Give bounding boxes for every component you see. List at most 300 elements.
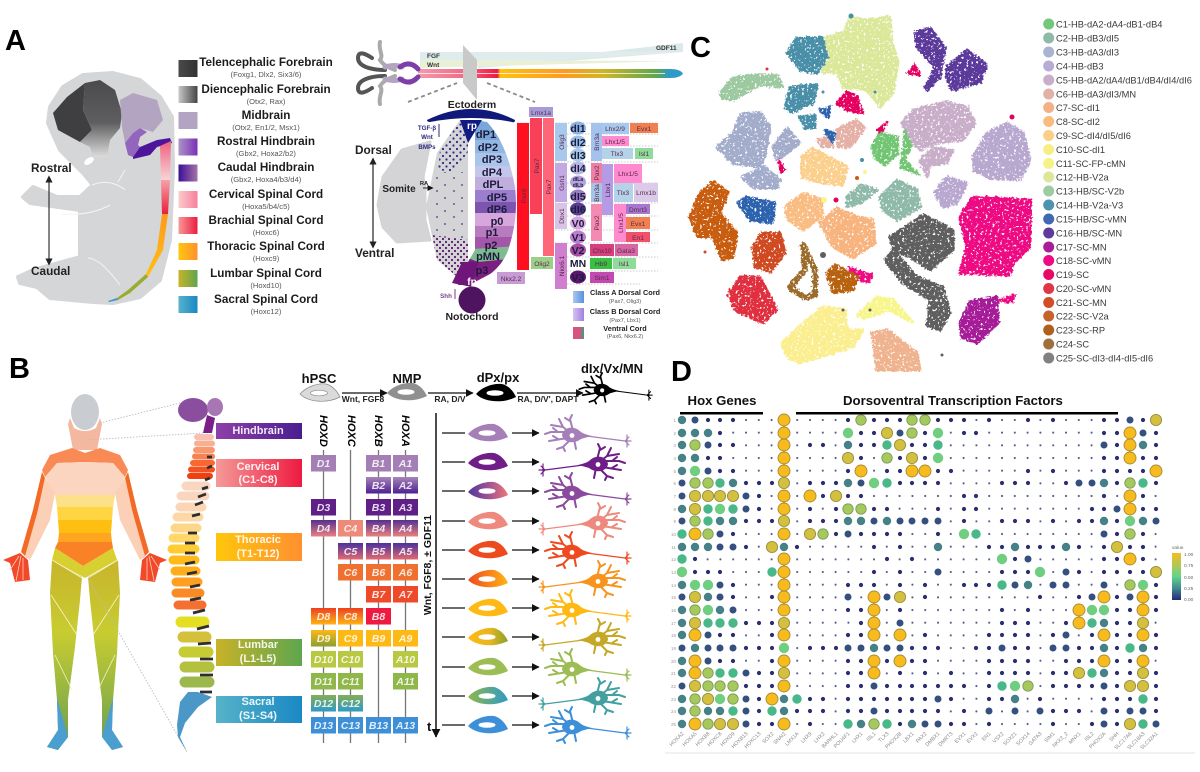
class A: (Pax7, Olig3) <box>609 299 641 305</box>
column Pax6 <box>517 123 529 270</box>
panel D: gene labels: SOX2 <box>761 731 775 745</box>
panel D: gene labels: SOX14 <box>1015 731 1031 747</box>
cluster C20 <box>728 277 777 323</box>
right arm <box>115 472 167 582</box>
tube right half bands <box>458 121 516 285</box>
panel D: gene labels: SLC17A6 <box>1113 731 1133 751</box>
box Olig2: Olig2 <box>534 261 550 268</box>
morphogen labels: Wnt <box>421 134 433 141</box>
HOX column headings: HOXC <box>345 415 357 448</box>
panel C: tSNE clusters <box>690 17 1030 370</box>
row 5 <box>468 532 631 568</box>
cluster C25 <box>885 215 953 330</box>
legend cervical: (Hoxa5/b4/c5) <box>242 202 290 211</box>
heading Hox Genes: Hox Genes <box>688 393 756 408</box>
panel D: row labels: 14 <box>671 583 676 588</box>
row 7 <box>468 590 631 626</box>
roof plate <box>460 120 482 143</box>
HOX boxes: D11 <box>314 676 333 688</box>
cluster C1 <box>872 133 898 165</box>
scattered mixed cells <box>900 130 920 175</box>
panel B: spine <box>172 398 223 752</box>
morphogen labels: BMPs <box>418 144 436 151</box>
panel D: row labels: 21 <box>671 671 676 676</box>
marker boxes: En1 <box>632 235 644 242</box>
HOX boxes: C6 <box>344 567 357 579</box>
progenitor domain labels: dP6 <box>487 204 507 216</box>
HOX boxes: B8 <box>372 611 385 623</box>
morphogen labels <box>418 124 455 300</box>
HOX boxes: C13 <box>341 720 360 732</box>
HOX column headings <box>317 415 411 448</box>
cluster C10 <box>782 307 863 363</box>
class B: (Pax7, Lbx1) <box>609 318 641 324</box>
HOX boxes: C12 <box>341 698 360 710</box>
neuron class ellipses: dI3 <box>570 150 586 162</box>
ectoderm arc <box>427 109 515 122</box>
label Wnt: Wnt <box>427 62 440 69</box>
legend telencephalic <box>178 56 333 79</box>
vertebral discs <box>185 457 213 692</box>
HOX boxes: C9 <box>344 633 357 645</box>
brain top view <box>358 42 418 104</box>
panel D: value colour scale: 0.25 <box>1184 586 1194 592</box>
panel A: neural tube axis schematic <box>358 42 683 104</box>
panel D: gene labels <box>669 731 1159 751</box>
cluster C8 <box>785 193 822 230</box>
panel D: gene labels: HOXC8 <box>707 731 723 748</box>
neuron class ellipses: dI5 <box>570 191 586 203</box>
thoracic cord <box>146 214 168 277</box>
column Olig3 <box>555 123 567 161</box>
panel D: row labels: 8 <box>673 507 676 512</box>
cervical bar: (C1-C8) <box>238 474 278 486</box>
C2: C2-HB-dB3/dI5 <box>1056 34 1119 44</box>
HOX boxes: D4 <box>317 523 330 535</box>
progenitor domain labels: p1 <box>486 227 498 239</box>
sacrum <box>177 692 212 752</box>
vertebra bodies <box>172 437 212 682</box>
panel D: row labels: 10 <box>671 532 676 537</box>
panel D: row labels: 4 <box>673 456 676 461</box>
brachial cord <box>161 180 170 214</box>
C18: C18-SC-vMN <box>1056 256 1111 266</box>
label FGF: FGF <box>427 53 440 60</box>
C7: C7-SC-dI1 <box>1056 103 1100 113</box>
midbrain <box>120 93 163 143</box>
legend thoracic <box>178 240 325 263</box>
neuron class ellipses: dI4 <box>570 163 586 175</box>
marker boxes: Tlx3 <box>617 190 630 197</box>
column Nkx6.1: Nkx6.1 <box>559 255 566 276</box>
C6: C6-HB-dA3/dI3/MN <box>1056 90 1136 100</box>
legend sacral <box>178 293 318 316</box>
progenitor domain labels: dP3 <box>482 154 502 166</box>
column Pax7 <box>530 118 542 214</box>
HOX boxes: A10 <box>395 654 415 666</box>
HOX column headings: HOXB <box>372 415 384 447</box>
cluster C23 <box>827 265 858 293</box>
column Pax7 second <box>543 118 554 256</box>
panel B: region bars <box>216 423 302 723</box>
cervical cord <box>160 141 171 180</box>
hips <box>52 548 117 578</box>
neuron class ellipses: MN <box>570 258 586 270</box>
notochord <box>458 286 486 314</box>
cervical bar: Cervical <box>237 461 279 473</box>
C22: C22-SC-V2a <box>1056 312 1110 322</box>
ventral progenitor dots <box>432 235 468 285</box>
HOX boxes: C5 <box>344 546 357 558</box>
cluster C22 <box>690 182 737 260</box>
hPSC stage: hPSC <box>302 371 337 386</box>
panel D: gene labels: NKX2_2 <box>1052 731 1069 749</box>
panel D: row labels: 3 <box>673 443 676 448</box>
cluster C4 <box>935 123 1030 207</box>
progenitor domain labels: dP1 <box>476 129 496 141</box>
HOX boxes: D3 <box>317 502 330 514</box>
legend diencephalic: (Otx2, Rax) <box>247 97 286 106</box>
C20: C20-SC-vMN <box>1056 284 1111 294</box>
panel A: regional legend <box>178 56 333 316</box>
panel D: row labels: 19 <box>671 646 676 651</box>
HOX boxes: D12 <box>314 698 333 710</box>
NMP stage <box>387 371 427 400</box>
column Nkx6.1 <box>555 243 567 289</box>
marker boxes: Lmx1b <box>636 190 656 197</box>
class A <box>573 288 660 305</box>
HOX boxes: C8 <box>344 611 357 623</box>
panel D: row labels: 20 <box>671 659 676 664</box>
panel B: human dermatome body <box>3 394 203 752</box>
panel D: value colour scale <box>1172 545 1194 603</box>
panel D: row labels: 22 <box>671 684 676 689</box>
label caudal: Caudal <box>31 264 70 278</box>
column Pax6: Pax6 <box>521 188 528 204</box>
panel D: gene labels: LBX1 <box>902 731 915 744</box>
left leg <box>47 560 82 750</box>
column Olig3: Olig3 <box>559 134 566 150</box>
HOX lines <box>324 450 406 743</box>
panel A: embryo illustration <box>18 73 173 303</box>
marker boxes: Evx1 <box>637 126 652 133</box>
head <box>71 394 99 430</box>
cluster C6 <box>818 120 865 147</box>
HOX boxes: D1 <box>317 458 330 470</box>
panel D: gene labels: HOXB13 <box>731 731 749 750</box>
progenitor domain labels: dP5 <box>487 192 507 204</box>
column Dbx1 <box>555 203 567 229</box>
legend brachial <box>178 214 323 237</box>
torso bands <box>55 495 115 566</box>
panel D: baseline rule <box>665 752 1195 754</box>
HOX boxes: A7 <box>398 589 413 601</box>
C11: C11-SC-FP-cMN <box>1056 159 1126 169</box>
panel D: gene labels: HOXA5 <box>682 731 698 748</box>
HOX boxes: B2 <box>372 480 385 492</box>
marker boxes: Brn3a <box>594 133 601 151</box>
panel D: gene labels: HOXB8 <box>695 731 711 748</box>
right leg <box>88 560 123 750</box>
panel D: gene labels: POU4F1 <box>833 731 851 750</box>
chest <box>45 462 125 495</box>
cluster C18 <box>849 197 1030 302</box>
panel D: gene labels: SOX21 <box>1002 731 1018 747</box>
column Pax7: Pax7 <box>534 158 541 174</box>
HOX boxes: A2 <box>398 480 412 492</box>
cluster C5 <box>902 102 975 177</box>
panel D: gene labels: LHX1 <box>851 731 864 745</box>
cluster C19 <box>779 65 920 172</box>
HOX boxes: A6 <box>398 567 412 579</box>
ventral cord: Ventral Cord <box>603 324 647 333</box>
HOX boxes: A9 <box>398 633 412 645</box>
HOX boxes: B9 <box>372 633 385 645</box>
HOX column headings: HOXD <box>317 415 329 447</box>
panel D: row labels: 1 <box>673 418 676 423</box>
panel D: gene labels: TLX3 <box>877 731 890 744</box>
panel D: gene labels: HOXD9 <box>720 731 736 748</box>
neuron class ellipses: V0 <box>572 218 585 230</box>
panel D: value colour scale: 1.00 <box>1184 552 1194 558</box>
sacral bar: Sacral <box>241 696 275 708</box>
C24: C24-SC <box>1056 340 1089 350</box>
marker boxes: Dmrt3 <box>629 207 647 214</box>
HOX column headings: HOXA <box>399 415 411 447</box>
marker boxes: Lhx1/5 <box>618 171 638 178</box>
legend rostral hindbrain: Rostral Hindbrain <box>217 135 315 148</box>
marker boxes: Lbx1 <box>605 183 612 197</box>
panel D: gene labels: SLC32A1 <box>1139 731 1159 751</box>
column Pax7 second: Pax7 <box>546 179 553 195</box>
arrow RA D/V: RA, D/V <box>434 394 466 404</box>
panel D: gene labels: PHOX2A <box>1088 731 1108 750</box>
arrow RA D/V <box>428 393 473 404</box>
tube left half <box>426 120 468 285</box>
panel D: gene labels: LHX9 <box>800 731 813 745</box>
progenitor domain labels: p3 <box>476 265 488 277</box>
marker boxes: Hb9 <box>595 261 607 268</box>
marker boxes: Isl1 <box>639 151 649 158</box>
lumbar bar <box>216 639 302 666</box>
C16: C16-HB/SC-MN <box>1056 228 1122 238</box>
legend brachial: (Hoxc6) <box>253 228 280 237</box>
marker boxes: Pax2 <box>594 165 601 181</box>
row 10 <box>468 678 625 714</box>
marker boxes: Lhx1/5 <box>605 139 625 146</box>
HOX boxes: A4 <box>398 523 412 535</box>
panel D: value colour scale: 0.50 <box>1184 575 1194 581</box>
neuron class ellipses: V2 <box>572 245 585 257</box>
telencephalic forebrain <box>53 83 92 142</box>
panel D: row labels: 2 <box>673 431 676 436</box>
dPx/px stage <box>476 370 520 401</box>
box Nkx2.2 <box>497 272 525 284</box>
morphogen labels: TGF-β <box>418 125 436 132</box>
C15: C15-HB/SC-vMN <box>1056 214 1127 224</box>
panel A letter: A <box>5 25 26 57</box>
dorsal progenitor dots <box>438 122 468 172</box>
panel B: differentiation header <box>300 361 652 404</box>
panel D: gene labels: SHH <box>1108 731 1121 743</box>
legend thoracic: (Hoxc9) <box>253 254 280 263</box>
thoracic bar: Thoracic <box>235 534 281 546</box>
row 1 <box>468 415 631 451</box>
legend diencephalic <box>178 83 331 106</box>
panel D: gene labels: DMRT3 <box>938 731 954 748</box>
time arrow <box>435 413 437 737</box>
HOX boxes: B5 <box>372 546 385 558</box>
C23: C23-SC-RP <box>1056 326 1105 336</box>
progenitor domain labels: pMN <box>476 251 500 263</box>
label somite: Somite <box>382 184 416 195</box>
HOX boxes: B4 <box>372 523 385 535</box>
HOX boxes: D8 <box>317 611 330 623</box>
neuron stage: dIx/Vx/MN <box>581 361 643 376</box>
HOX boxes: B1 <box>372 458 385 470</box>
C1: C1-HB-dA2-dA4-dB1-dB4 <box>1056 20 1162 30</box>
progenitor domain labels: dPL <box>483 179 504 191</box>
lumbar bar: (L1-L5) <box>240 653 277 665</box>
NMP stage: NMP <box>393 371 422 386</box>
marker boxes: Evx1 <box>631 221 646 228</box>
marker boxes: Pax2 <box>594 215 601 231</box>
cluster C7 lower <box>872 330 920 370</box>
C13: C13-HB/SC-V2b <box>1056 186 1124 196</box>
panel D: row labels: 9 <box>673 519 676 524</box>
panel B: neuron rows <box>442 415 631 743</box>
legend telencephalic: Telencephalic Forebrain <box>199 56 333 69</box>
rostral caudal axis arrow <box>48 179 50 262</box>
C8: C8-SC-dI2 <box>1056 117 1100 127</box>
C17: C17-SC-MN <box>1056 242 1107 252</box>
sacral cord <box>108 298 118 302</box>
thoracic bar: (T1-T12) <box>237 548 280 560</box>
neck <box>68 418 102 450</box>
cluster C14 <box>785 38 827 128</box>
neuron class ellipses: dI1 <box>570 123 586 135</box>
shoulders <box>42 448 128 477</box>
panel D: value colour scale: value <box>1172 545 1184 551</box>
C9: C9-SC-dI4/dI5/dI6 <box>1056 131 1131 141</box>
neuron class ellipses: dILb <box>573 183 583 189</box>
label ventral: Ventral <box>355 246 394 260</box>
zoom dotted lines <box>408 83 535 102</box>
panel C: cluster legend <box>1043 18 1192 364</box>
row 8 <box>468 619 625 655</box>
row 9 <box>468 649 631 685</box>
section plane <box>463 45 477 100</box>
dPx/px stage: dPx/px <box>477 370 520 385</box>
legend cervical <box>178 188 323 211</box>
panel D: gene labels: MNX1 <box>1068 731 1082 746</box>
arrow RA D/V DAPT: RA, D/V', DAPT <box>517 394 579 404</box>
progenitor domain labels: p0 <box>491 216 503 228</box>
progenitor domain labels: rp <box>467 121 477 132</box>
rostral hindbrain <box>125 128 147 157</box>
HOX boxes <box>311 455 418 734</box>
box Lmx1a: Lmx1a <box>531 110 551 117</box>
Wnt gradient band <box>420 60 675 68</box>
heading Dorsoventral: Dorsoventral Transcription Factors <box>843 393 1063 408</box>
progenitor domain labels: dP4 <box>482 167 503 179</box>
diencephalic forebrain <box>80 80 122 157</box>
panel D: gene labels: EN1 <box>981 731 992 743</box>
C25: C25-SC-dI3-dI4-dI5-dI6 <box>1056 354 1153 364</box>
panel D: gene labels: VSX2 <box>992 731 1005 745</box>
HOX boxes: B7 <box>372 589 386 601</box>
left arm <box>3 472 55 582</box>
embryo body <box>18 73 173 303</box>
neuron class ellipses: dI2 <box>570 137 586 149</box>
neuron class ellipses: dI6 <box>570 204 586 216</box>
panel D: row labels: 5 <box>673 469 676 474</box>
HOX boxes: D13 <box>314 720 333 732</box>
marker boxes: Brn3a <box>594 184 601 202</box>
C19: C19-SC <box>1056 270 1089 280</box>
HOX boxes: A11 <box>395 676 415 688</box>
row 2 <box>468 444 625 480</box>
label morphogens: Wnt, FGF8, ± GDF11 <box>422 515 434 615</box>
marker boxes: Tlx3 <box>611 151 624 158</box>
panel D: gene labels: BARHL1 <box>821 731 839 750</box>
HOX boxes: C4 <box>344 523 357 535</box>
floor plate <box>452 262 478 287</box>
hindbrain bar <box>216 423 302 439</box>
marker boxes: Lhx1/5 <box>618 213 625 233</box>
panel D: gene labels: LHX2 <box>813 731 826 745</box>
legend midbrain: Midbrain <box>242 109 290 122</box>
panel D: gene labels: ISL2 <box>1084 731 1095 743</box>
legend midbrain <box>178 109 300 132</box>
heading bars <box>680 412 1118 414</box>
panel D: row labels: 25 <box>671 722 676 727</box>
row 4 <box>468 503 625 539</box>
cluster C24 ring <box>790 245 815 298</box>
C21: C21-SC-MN <box>1056 298 1107 308</box>
zoom guides <box>85 403 203 752</box>
column Dbx1: Dbx1 <box>559 208 566 224</box>
panel D: value colour scale: 0.75 <box>1184 563 1194 569</box>
panel D: gene labels: PAX2 <box>915 731 928 745</box>
column Gsh1 <box>555 163 567 202</box>
thoracic bar <box>216 533 302 561</box>
HOX boxes: A3 <box>398 502 412 514</box>
panel D: row labels: 24 <box>671 709 676 714</box>
panel D: gene labels: HOXA2 <box>669 731 685 748</box>
HOX boxes: D9 <box>317 633 330 645</box>
panel D: gene labels: PHOX2B <box>884 731 904 750</box>
dorsal ventral arrow <box>372 161 374 245</box>
panel D: row labels: 13 <box>671 570 676 575</box>
scattered stray cell dots <box>704 14 1014 356</box>
lumbar bar: Lumbar <box>238 639 279 651</box>
C12: C12-HB-V2a <box>1056 172 1110 182</box>
panel D: row labels: 7 <box>673 494 676 499</box>
panel D: row labels: 6 <box>673 481 676 486</box>
progenitor domain labels <box>467 121 507 288</box>
caudal hindbrain <box>133 138 172 159</box>
C4: C4-HB-dB3 <box>1056 62 1104 72</box>
marker boxes: Sim1 <box>594 275 610 282</box>
panel A: neural tube cross-section <box>355 99 520 323</box>
HOX boxes: C10 <box>341 654 360 666</box>
lumbar cord <box>117 274 148 300</box>
label GDF11: GDF11 <box>656 45 677 52</box>
legend brachial: Brachial Spinal Cord <box>209 214 323 227</box>
panel D: gene labels: EVX1 <box>954 731 967 745</box>
panel D letter: D <box>671 356 692 388</box>
